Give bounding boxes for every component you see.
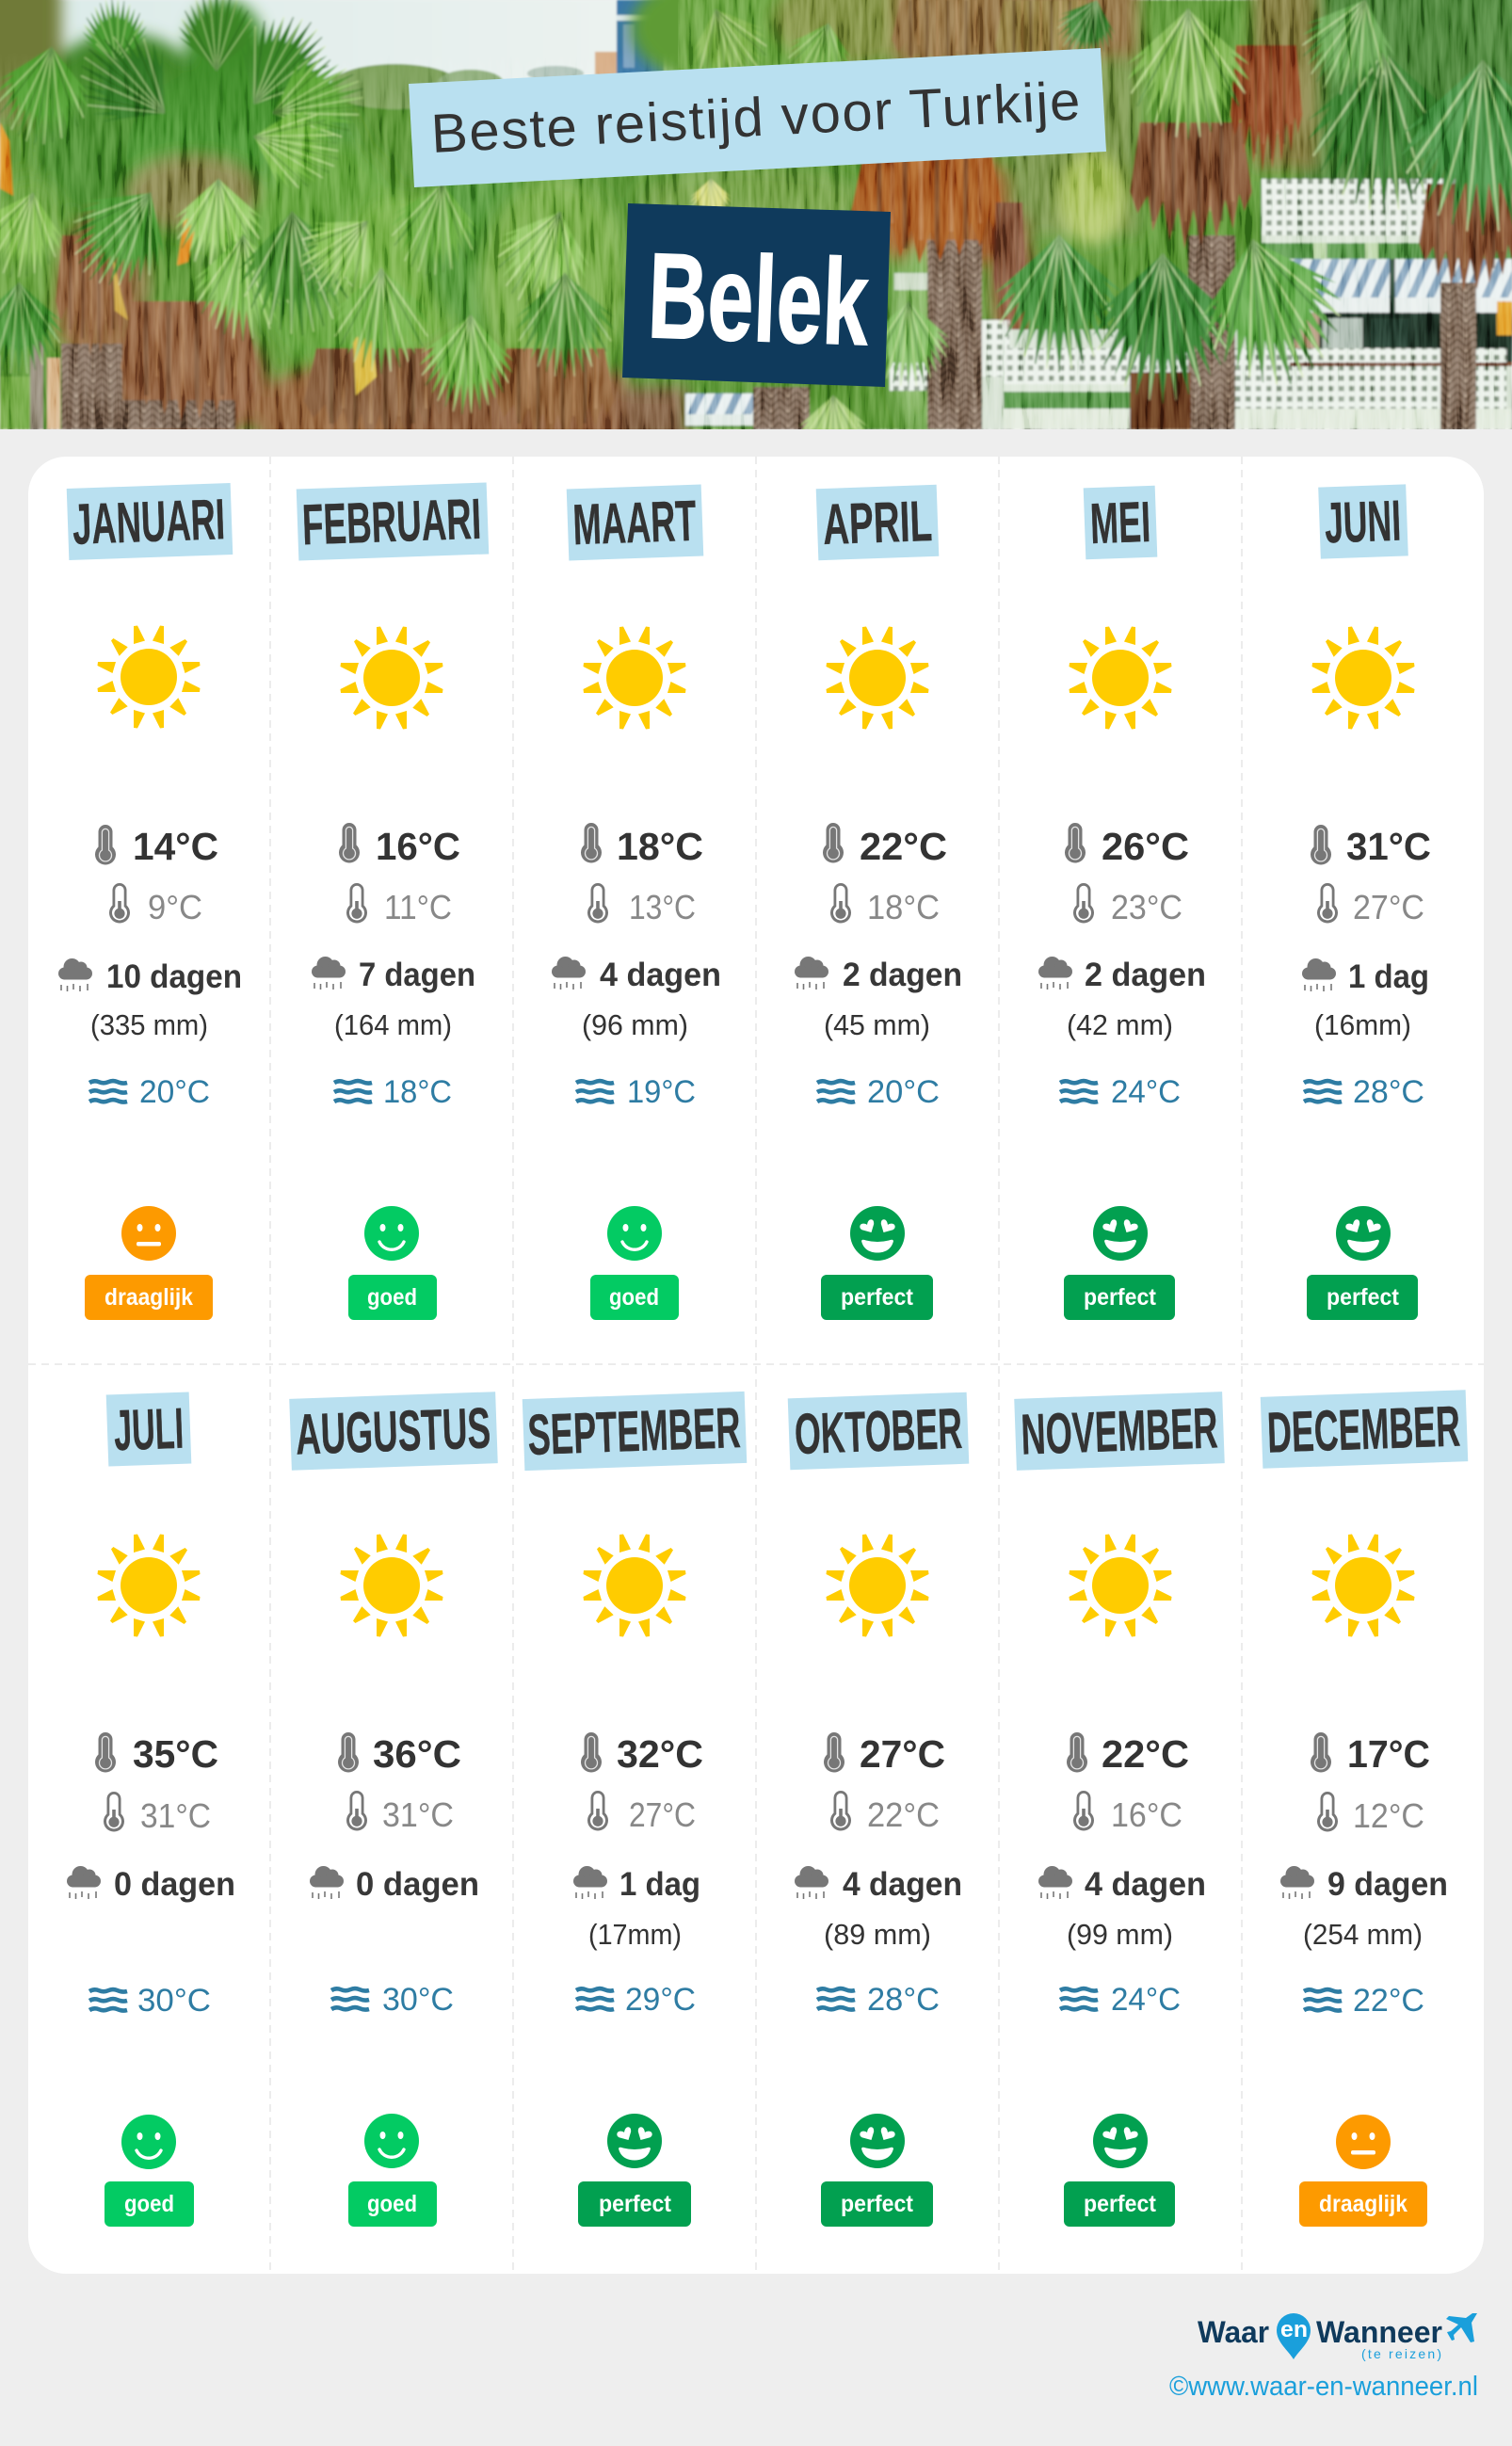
min temperature <box>109 883 202 926</box>
title banner: Beste reistijd voor Turkije <box>429 71 1082 165</box>
sea temperature <box>817 1982 940 2018</box>
rating badge: perfect <box>1327 1284 1400 1311</box>
place name box <box>622 203 891 387</box>
rating badge: perfect <box>841 2191 914 2217</box>
min temperature <box>1073 1791 1182 1834</box>
month label <box>788 1392 969 1470</box>
min temperature <box>104 1792 211 1835</box>
rating icon <box>1093 2114 1148 2168</box>
sea temperature: 24°C <box>1111 1982 1181 2018</box>
rainfall amount: (254 mm) <box>1303 1918 1423 1951</box>
logo: Waar en Wanneer: Wanneer <box>1316 2315 1442 2349</box>
rating icon <box>850 2114 905 2168</box>
rating badge: perfect <box>599 2191 672 2217</box>
icon: airplane <box>1446 2313 1477 2342</box>
min temperature: 31°C <box>140 1796 211 1835</box>
month label: MEI <box>1089 490 1151 555</box>
rating icon <box>850 1206 905 1261</box>
icon: sun <box>827 627 928 729</box>
rain days <box>795 957 962 993</box>
month label <box>297 482 489 561</box>
rating badge: draaglijk <box>1319 2191 1407 2217</box>
rating icon <box>121 1206 176 1261</box>
month panel: januari <box>58 483 242 1320</box>
sea temperature: 19°C <box>627 1074 696 1110</box>
rainfall amount: (42 mm) <box>1067 1008 1173 1041</box>
max temperature <box>1311 825 1431 868</box>
rain days: 4 dagen <box>843 1866 962 1903</box>
rain days: 2 dagen <box>843 957 962 993</box>
icon: sun <box>341 627 442 729</box>
month label <box>523 1392 747 1471</box>
rain days <box>573 1866 700 1903</box>
month label <box>106 1392 191 1467</box>
sea temperature <box>334 1074 452 1110</box>
month label <box>67 483 233 560</box>
min temperature: 13°C <box>629 888 696 926</box>
rating badge <box>348 2181 437 2227</box>
logo: Waar en Wanneer: Waar <box>1198 2315 1269 2349</box>
max temperature <box>581 823 703 868</box>
rating icon <box>121 2115 176 2169</box>
month panel: oktober <box>788 1392 969 2227</box>
month label <box>1084 486 1157 559</box>
place name box: Belek <box>646 228 871 371</box>
min temperature: 22°C <box>867 1795 940 1834</box>
min temperature: 9°C <box>148 888 202 926</box>
max temperature: 17°C <box>1347 1732 1430 1776</box>
sea temperature <box>1304 1074 1424 1110</box>
month label <box>1318 484 1408 559</box>
min temperature <box>1317 1792 1424 1835</box>
website credit: ©www.waar-en-wanneer.nl <box>1169 2372 1478 2402</box>
rain days: 0 dagen <box>114 1866 235 1903</box>
month panel: november <box>1014 1392 1225 2227</box>
min temperature <box>830 883 940 926</box>
rating badge <box>590 1275 679 1320</box>
month label: JULI <box>113 1396 185 1462</box>
rating badge <box>348 1275 437 1320</box>
sea temperature: 28°C <box>1353 1074 1424 1110</box>
month label: OKTOBER <box>794 1396 963 1466</box>
rating badge: goed <box>124 2191 174 2217</box>
rating icon <box>364 2114 419 2168</box>
min temperature: 18°C <box>867 888 940 926</box>
rain days: 9 dagen <box>1327 1866 1448 1903</box>
min temperature <box>1317 883 1424 926</box>
max temperature: 26°C <box>1102 825 1189 868</box>
rating badge <box>1064 2181 1175 2227</box>
icon: map pin <box>1277 2313 1311 2359</box>
month panel: mei <box>1038 486 1206 1320</box>
rain days <box>312 957 475 993</box>
rating badge: perfect <box>1084 1284 1157 1311</box>
sea temperature <box>1060 1982 1181 2018</box>
min temperature: 12°C <box>1353 1796 1424 1835</box>
sea temperature <box>1060 1074 1181 1110</box>
logo: Waar en Wanneer: (te reizen) <box>1361 2346 1441 2361</box>
month label: FEBRUARI <box>301 487 482 556</box>
sea temperature <box>576 1074 696 1110</box>
min temperature <box>830 1791 940 1834</box>
rating badge <box>821 2181 933 2227</box>
sea temperature <box>89 1983 211 2019</box>
rating icon <box>364 1206 419 1261</box>
min temperature <box>587 1791 696 1834</box>
rain days: 1 dag <box>1348 958 1429 995</box>
sea temperature: 18°C <box>383 1074 452 1110</box>
min temperature: 11°C <box>384 888 452 926</box>
month label: SEPTEMBER <box>526 1395 742 1467</box>
sea temperature: 22°C <box>1353 1983 1424 2019</box>
icon: sun <box>584 627 685 729</box>
rain days: 10 dagen <box>106 958 242 995</box>
rain days: 7 dagen <box>359 957 475 993</box>
rainfall amount: (99 mm) <box>1067 1918 1173 1951</box>
month label <box>289 1392 498 1471</box>
rating badge: draaglijk <box>105 1284 193 1311</box>
max temperature <box>339 823 460 868</box>
min temperature: 27°C <box>1353 888 1424 926</box>
rain days: 1 dag <box>619 1866 700 1903</box>
month label: AUGUSTUS <box>295 1395 491 1467</box>
min temperature <box>346 1791 454 1834</box>
rain days: 0 dagen <box>356 1866 479 1903</box>
rating icon <box>1093 1206 1148 1261</box>
sea temperature: 30°C <box>382 1982 454 2018</box>
photo scenery <box>0 0 1512 470</box>
sea temperature: 29°C <box>625 1982 696 2018</box>
rainfall amount: (89 mm) <box>824 1918 931 1951</box>
month label: NOVEMBER <box>1020 1395 1219 1467</box>
rating badge <box>1064 1275 1175 1320</box>
max temperature: 18°C <box>617 825 703 868</box>
palm fans <box>179 0 254 71</box>
icon: sun <box>1312 627 1414 729</box>
trunks <box>61 344 122 429</box>
sea temperature <box>576 1982 696 2018</box>
min temperature: 27°C <box>629 1795 696 1834</box>
rating icon <box>607 2114 662 2168</box>
rainfall amount: (17mm) <box>588 1918 682 1951</box>
texture overlay <box>0 0 1512 429</box>
min temperature <box>587 883 696 926</box>
month label <box>816 485 939 560</box>
max temperature <box>95 1732 218 1776</box>
max temperature <box>95 825 218 868</box>
icon: sun <box>341 1535 442 1636</box>
min temperature: 23°C <box>1111 888 1182 926</box>
sea temperature <box>817 1074 940 1110</box>
icon: sun <box>584 1535 685 1636</box>
month panel: augustus <box>289 1392 498 2227</box>
rainfall amount: (45 mm) <box>824 1008 930 1041</box>
month label: JUNI <box>1324 489 1402 555</box>
max temperature <box>1311 1732 1430 1776</box>
max temperature: 27°C <box>860 1732 945 1776</box>
month panel: maart <box>552 485 721 1320</box>
month label: APRIL <box>822 489 933 556</box>
sea temperature: 30°C <box>137 1983 211 2019</box>
rainfall amount: (335 mm) <box>90 1008 208 1041</box>
header photo: palm trees and hotel <box>0 0 1512 470</box>
sea temperature: 24°C <box>1111 1074 1181 1110</box>
rating badge <box>1299 2181 1427 2227</box>
rain days <box>1302 958 1429 995</box>
rating badge <box>821 1275 933 1320</box>
icon: sun <box>1070 1535 1171 1636</box>
sea temperature: 20°C <box>139 1074 210 1110</box>
max temperature: 31°C <box>1346 825 1431 868</box>
rain days: 4 dagen <box>600 957 721 993</box>
rating badge: perfect <box>841 1284 914 1311</box>
min temperature <box>346 883 452 926</box>
month label <box>567 485 703 560</box>
rating icon <box>1336 1206 1391 1261</box>
rainfall amount: (16mm) <box>1314 1008 1411 1041</box>
sea temperature: 28°C <box>867 1982 940 2018</box>
rating badge <box>85 1275 213 1320</box>
max temperature <box>1065 823 1189 868</box>
rain days <box>795 1866 962 1903</box>
sea temperature <box>1304 1983 1424 2019</box>
rating icon <box>607 1206 662 1261</box>
sea temperature: 20°C <box>867 1074 940 1110</box>
panel: monthly climate card <box>28 457 1484 2274</box>
min temperature: 31°C <box>382 1795 454 1834</box>
month panel: september <box>523 1392 747 2227</box>
max temperature: 32°C <box>617 1732 703 1776</box>
logo: Waar en Wanneer: en <box>1280 2317 1308 2342</box>
max temperature: 22°C <box>1102 1732 1189 1776</box>
brown hanging skirts <box>56 235 133 356</box>
month panel: juni <box>1302 484 1431 1320</box>
min temperature <box>1073 883 1182 926</box>
rating badge <box>578 2181 691 2227</box>
min temperature: 16°C <box>1111 1795 1182 1834</box>
max temperature <box>823 823 947 868</box>
icon: sun <box>1070 627 1171 729</box>
sea temperature <box>331 1982 454 2018</box>
rainfall amount: (164 mm) <box>334 1008 452 1041</box>
rating badge: goed <box>367 2191 417 2217</box>
rating badge <box>105 2181 194 2227</box>
rating badge: perfect <box>1084 2191 1157 2217</box>
rainfall amount: (96 mm) <box>582 1008 688 1041</box>
orange dead fronds <box>177 215 198 266</box>
month panel: februari <box>297 482 489 1320</box>
month panel: juli <box>67 1392 235 2227</box>
rain days: 4 dagen <box>1085 1866 1206 1903</box>
rating badge: goed <box>609 1284 659 1311</box>
month label <box>1014 1392 1225 1471</box>
rain days: 2 dagen <box>1085 957 1206 993</box>
title banner <box>409 48 1106 187</box>
max temperature: 22°C <box>860 825 947 868</box>
month label: JANUARI <box>72 487 226 556</box>
icon: sun <box>1312 1535 1414 1636</box>
icon: sun <box>827 1535 928 1636</box>
month panel: december <box>1261 1390 1468 2227</box>
sea temperature <box>89 1074 210 1110</box>
icon: sun <box>98 625 200 729</box>
max temperature: 14°C <box>133 825 218 868</box>
icon: sun <box>98 1535 200 1636</box>
rating badge <box>1307 1275 1418 1320</box>
max temperature: 36°C <box>373 1732 461 1776</box>
max temperature <box>338 1732 461 1776</box>
month panel: april <box>795 485 962 1320</box>
max temperature: 35°C <box>133 1732 218 1776</box>
rating badge: goed <box>367 1284 417 1311</box>
rating icon <box>1336 2115 1391 2169</box>
max temperature: 16°C <box>376 825 460 868</box>
logo: Waar en Wanneer <box>1198 2313 1477 2361</box>
month label: MAART <box>571 489 698 556</box>
